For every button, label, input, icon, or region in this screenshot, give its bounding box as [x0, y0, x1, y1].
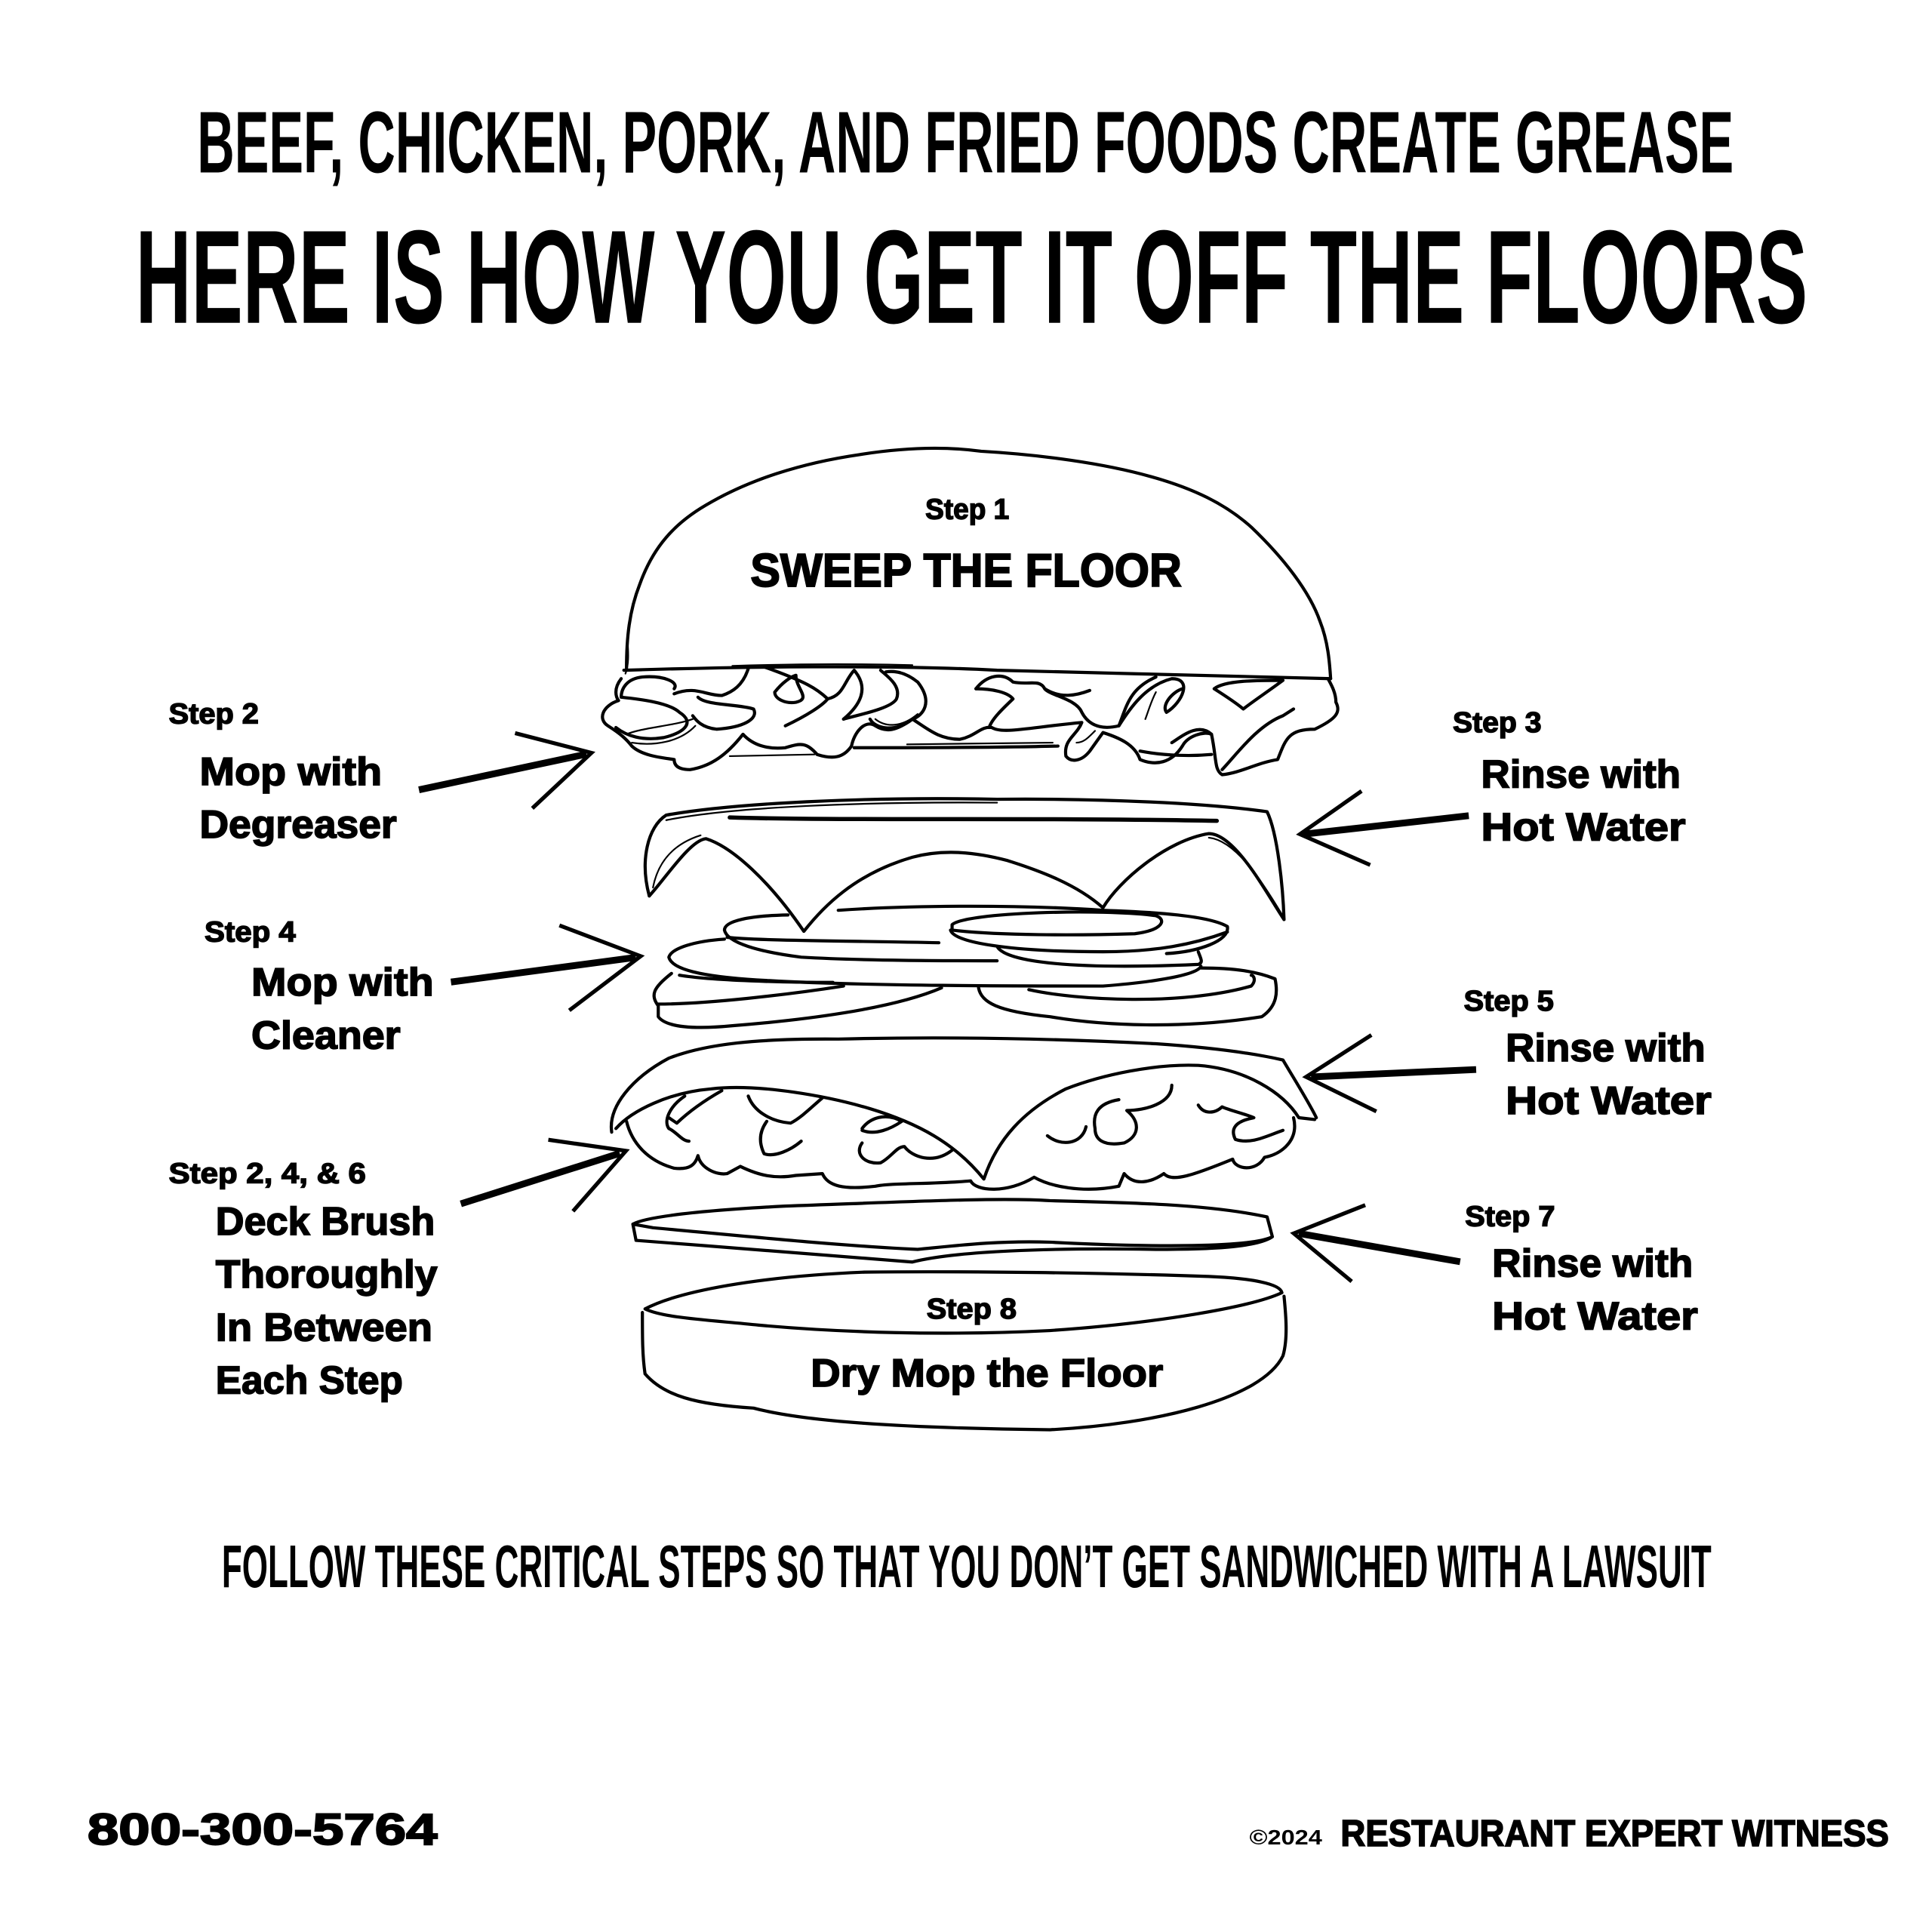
callout: step 3 [1453, 706, 1686, 850]
callout: steps 2, 4 and 6: Thoroughly [216, 1253, 438, 1297]
bottom bun [642, 1272, 1286, 1429]
callout: step 2: Mop with [199, 750, 382, 794]
callout: step 7: Rinse with [1492, 1241, 1693, 1285]
callout: step 7: Hot Water [1492, 1295, 1698, 1339]
arrow: step 2 [419, 733, 592, 808]
callout: steps 2, 4 and 6: Deck Brush [216, 1200, 435, 1244]
callout: step 5: Rinse with [1506, 1026, 1706, 1070]
copyright and brand: RESTAURANT EXPERT WITNESS [1340, 1814, 1889, 1854]
arrow: step 4 [451, 925, 641, 1011]
arrow: step 5 [1306, 1035, 1476, 1112]
label: step 1: SWEEP THE FLOOR [750, 545, 1182, 597]
callout: steps 2, 4 and 6: Step 2, 4, & 6 [169, 1157, 366, 1189]
arrow: steps 2, 4 and 6 [461, 1140, 626, 1211]
callout: step 4: Step 4 [205, 915, 296, 947]
callout: steps 2, 4 and 6: In Between [216, 1306, 432, 1349]
callout: step 5: Hot Water [1506, 1079, 1712, 1123]
burger illustration [602, 448, 1338, 1429]
callout: step 5: Step 5 [1464, 985, 1554, 1017]
label: step 8 [811, 1293, 1163, 1395]
top half of burger: bun, lettuce, cheese [602, 448, 1338, 931]
label: step 8: Step 8 [927, 1293, 1017, 1324]
callout: step 4: Cleaner [251, 1014, 401, 1057]
lettuce [602, 667, 1338, 774]
callout: step 3: Step 3 [1453, 706, 1542, 738]
callout: step 5 [1464, 985, 1712, 1123]
label: step 1 [750, 493, 1182, 597]
callout: step 2 [169, 697, 397, 847]
callout: step 3: Rinse with [1481, 752, 1681, 796]
callout: step 3: Hot Water [1481, 806, 1686, 850]
arrow: step 7 [1294, 1205, 1460, 1281]
upper cheese slice [645, 798, 1284, 931]
title block [136, 94, 1807, 352]
lower half of burger: tomato, cheese, patty, onion, bun [611, 906, 1316, 1429]
callout: step 2: Step 2 [169, 697, 259, 729]
callout: step 2: Degreaser [199, 803, 397, 847]
beef patty [626, 1085, 1294, 1189]
arrow: step 3 [1300, 791, 1469, 865]
callout: step 4: Mop with [251, 961, 434, 1004]
callout: step 7 [1465, 1201, 1698, 1339]
copyright and brand: ©2024 [1250, 1826, 1323, 1849]
callout: step 7: Step 7 [1465, 1201, 1555, 1232]
top bun [624, 448, 1331, 678]
callout: steps 2, 4 and 6: Each Step [216, 1359, 403, 1403]
onion slice [633, 1199, 1272, 1262]
lower cheese slice [611, 1038, 1316, 1179]
tomato slices [654, 906, 1276, 1027]
phone number: 800-300-5764 [88, 1805, 438, 1854]
label: step 1: Step 1 [925, 493, 1009, 525]
label: step 8: Dry Mop the Floor [811, 1352, 1163, 1395]
arrows [419, 733, 1476, 1281]
callout: step 4 [205, 915, 434, 1057]
callout: steps 2, 4 and 6 [169, 1157, 438, 1403]
